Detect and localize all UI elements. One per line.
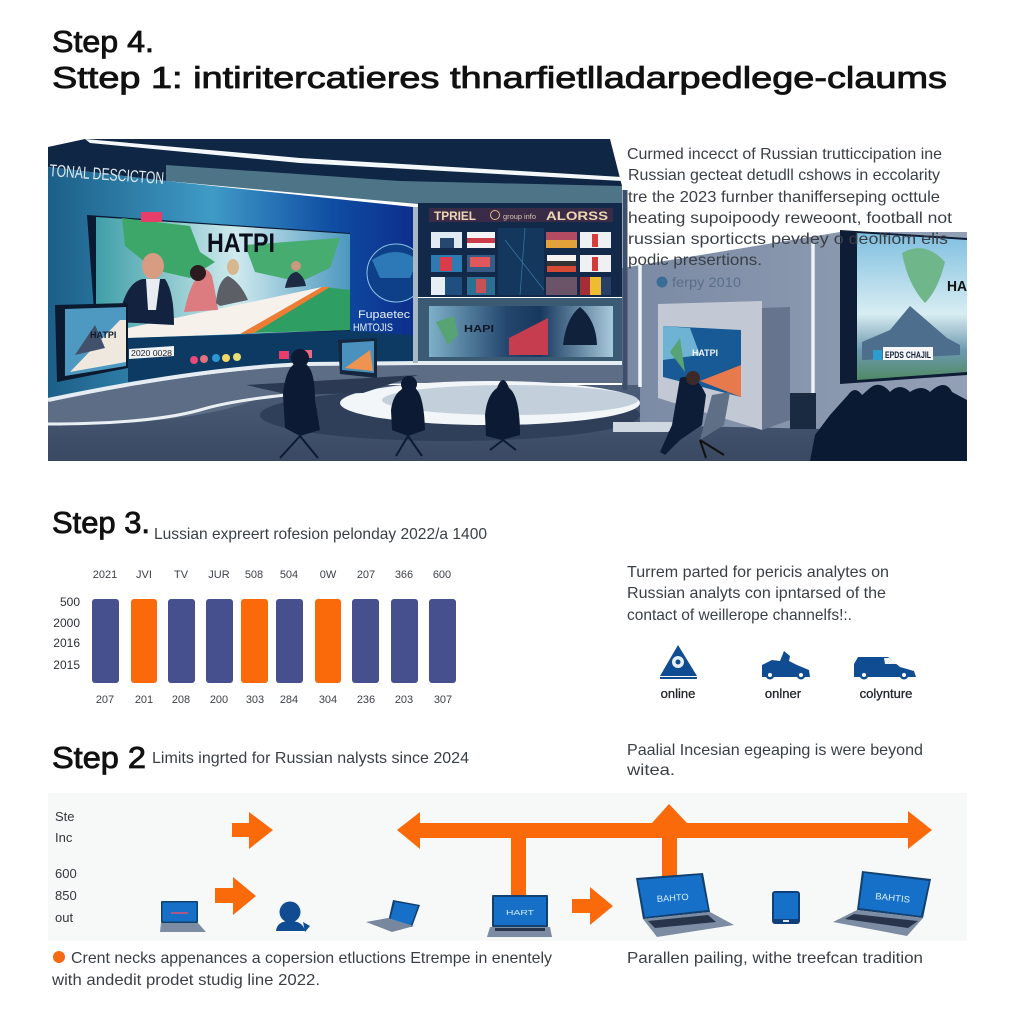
text block: intro paragraph (627, 146, 953, 269)
heading: step 2: Limits ingrted for Russian nalysts since 2024 (152, 750, 469, 767)
text block: intro paragraph: heating supoipoody reweoont, football not (628, 210, 953, 227)
panel row labels: out (55, 910, 73, 925)
chart y axis labels: 2015 (53, 658, 80, 672)
text block: parallel note: Paalial Incesian egeaping is were beyond (627, 742, 923, 759)
presenters at desk (118, 253, 306, 325)
large right screen: EPDS CHAJIL (885, 350, 931, 360)
chart top labels: 504 (280, 569, 298, 581)
heading: step 2 (52, 741, 469, 775)
chart top labels: 2021 (93, 569, 117, 581)
arrow: small left (215, 877, 256, 915)
text block: intro paragraph: russian sporticcts pevdey o deolfiom elis (628, 231, 948, 248)
small tv left (55, 303, 128, 382)
icon: triangle online (660, 645, 697, 701)
panel row labels: Inc (55, 830, 73, 845)
small desk monitor (246, 338, 418, 395)
icon: van (854, 657, 916, 701)
light pillars (640, 243, 813, 393)
title: Step 4. (52, 25, 154, 59)
caption on wall: ferpy 2010 (672, 274, 741, 290)
right kiosk with screen: HATPI (692, 348, 718, 358)
bar chart (53, 569, 456, 706)
heading: step 3 (52, 506, 487, 543)
icon: laptop 5: BAHTIS (875, 891, 911, 905)
lower ticker on big screen: 2020 0028 (131, 349, 173, 358)
panel: broadcast studio scene (48, 139, 967, 461)
text block: footnote right: Parallen pailing, withe treefcan tradition (627, 950, 923, 967)
audience silhouettes (810, 385, 967, 461)
arrow: small top (232, 812, 273, 849)
chart bottom labels: 284 (280, 694, 298, 706)
icon: convertible car (762, 651, 810, 701)
side globe and caption (353, 244, 425, 334)
icon: laptop 4: BAHTO (656, 892, 689, 904)
text block: parallel note: witea. (626, 762, 675, 779)
right dark panel: group info (503, 214, 536, 221)
panel row labels: 850 (55, 888, 77, 903)
icon: user (276, 902, 310, 932)
text block: intro paragraph: tre the 2023 furnber thanifferseping octtule (628, 189, 940, 206)
text block: footnote left: Crent necks appenances a copersion etluctions Etrempe in enentely (71, 950, 552, 967)
right dark panel: ALORSS (546, 209, 608, 223)
text block: footnote left (51, 950, 552, 989)
chart top labels: 366 (395, 569, 413, 581)
icon: laptop 2 (366, 900, 420, 932)
icon: laptop 4 (636, 873, 734, 937)
speaker box (790, 393, 816, 429)
icon: laptop 3: HART (506, 910, 535, 917)
lower ticker on big screen (128, 331, 413, 382)
chart top labels: 600 (433, 569, 451, 581)
text block: analysts note: Turrem parted for pericis analytes on (627, 564, 889, 581)
panel row labels: 600 (55, 866, 77, 881)
side presenter at table (613, 371, 730, 458)
header strip (166, 165, 622, 204)
round stage (260, 381, 640, 441)
lower right screen (418, 298, 622, 361)
panel row labels: Ste (55, 809, 75, 824)
chart bottom labels: 207 (96, 694, 114, 706)
icon: laptop 1 (160, 901, 206, 932)
icon: van: colynture (860, 686, 912, 701)
icon: laptop 3 (487, 895, 552, 937)
small tv left: HATPI (90, 330, 116, 340)
text block: footnote left: with andedit prodet studig line 2022. (51, 972, 320, 989)
big curved screen (48, 167, 413, 400)
chart bottom labels: 304 (319, 694, 337, 706)
bullet dot (53, 951, 65, 963)
text block: analysts note (627, 564, 889, 624)
chart top labels: TV (174, 569, 189, 581)
text block: intro paragraph: Russian gecteat detudll cshows in eccolarity (628, 167, 940, 184)
right kiosk with screen (658, 301, 790, 430)
chart top labels (93, 569, 451, 581)
text block: analysts note: Russian analyts con ipntarsed of the (627, 585, 886, 602)
chart bottom labels: 236 (357, 694, 375, 706)
side globe and caption: Fupaetec (358, 309, 411, 321)
header sign text: TONAL DESCICTON (49, 161, 165, 188)
icon: laptop 5 (833, 871, 931, 936)
chart y axis labels: 2016 (53, 636, 80, 650)
right dark panel: TPRIEL (434, 209, 476, 223)
chart bottom labels: 303 (246, 694, 264, 706)
icon: triangle online: online (661, 686, 695, 701)
chart top labels: JVI (136, 569, 152, 581)
text block: parallel note (626, 742, 923, 779)
arrow: small middle (572, 887, 613, 925)
icon: convertible car: onlner (765, 686, 802, 701)
panel row labels (55, 809, 77, 925)
chart top labels: 0W (320, 569, 337, 581)
title (52, 25, 947, 95)
chart bars (92, 599, 456, 683)
heading: step 3: Lussian expreert rofesion pelonday 2022/a 1400 (154, 526, 487, 543)
text block: intro paragraph: Curmed incecct of Russian trutticcipation ine (627, 146, 942, 163)
chart y axis labels (53, 595, 80, 672)
text block: intro paragraph: podic presertions. (628, 252, 762, 269)
arrow: main horizontal with branches (397, 804, 932, 896)
chart bottom labels: 200 (210, 694, 228, 706)
chart bottom labels: 201 (135, 694, 153, 706)
panel: flow diagram (48, 793, 967, 941)
inner map screen: HATPI (207, 228, 275, 258)
chart y axis labels: 500 (60, 595, 80, 609)
chart top labels: 207 (357, 569, 375, 581)
chart bottom labels (96, 694, 452, 706)
heading: step 2: Step 2 (52, 741, 146, 775)
side globe and caption: HMTOJIS (353, 322, 393, 334)
studio floor (48, 385, 967, 461)
title: Sttep 1: intiritercatieres thnarfietlladarpedlege-claums (52, 61, 947, 95)
chart bottom labels: 307 (434, 694, 452, 706)
right dark panel (418, 203, 622, 297)
heading: step 3: Step 3. (52, 506, 150, 540)
right wall (622, 232, 967, 440)
chart top labels: 508 (245, 569, 263, 581)
inner map screen (87, 212, 350, 338)
chart top labels: JUR (208, 569, 230, 581)
icon: tablet (772, 891, 800, 924)
ceiling (48, 139, 622, 205)
chart bottom labels: 208 (172, 694, 190, 706)
chart bottom labels: 203 (395, 694, 413, 706)
lower right screen: HAPI (464, 324, 494, 335)
text block: analysts note: contact of weillerope channelfs!:. (627, 607, 852, 624)
large right screen (840, 230, 967, 384)
large right screen: HA (947, 278, 967, 295)
chart y axis labels: 2000 (53, 616, 80, 630)
left stage block and light stripes (48, 364, 622, 425)
silhouettes of seated people (280, 349, 520, 458)
